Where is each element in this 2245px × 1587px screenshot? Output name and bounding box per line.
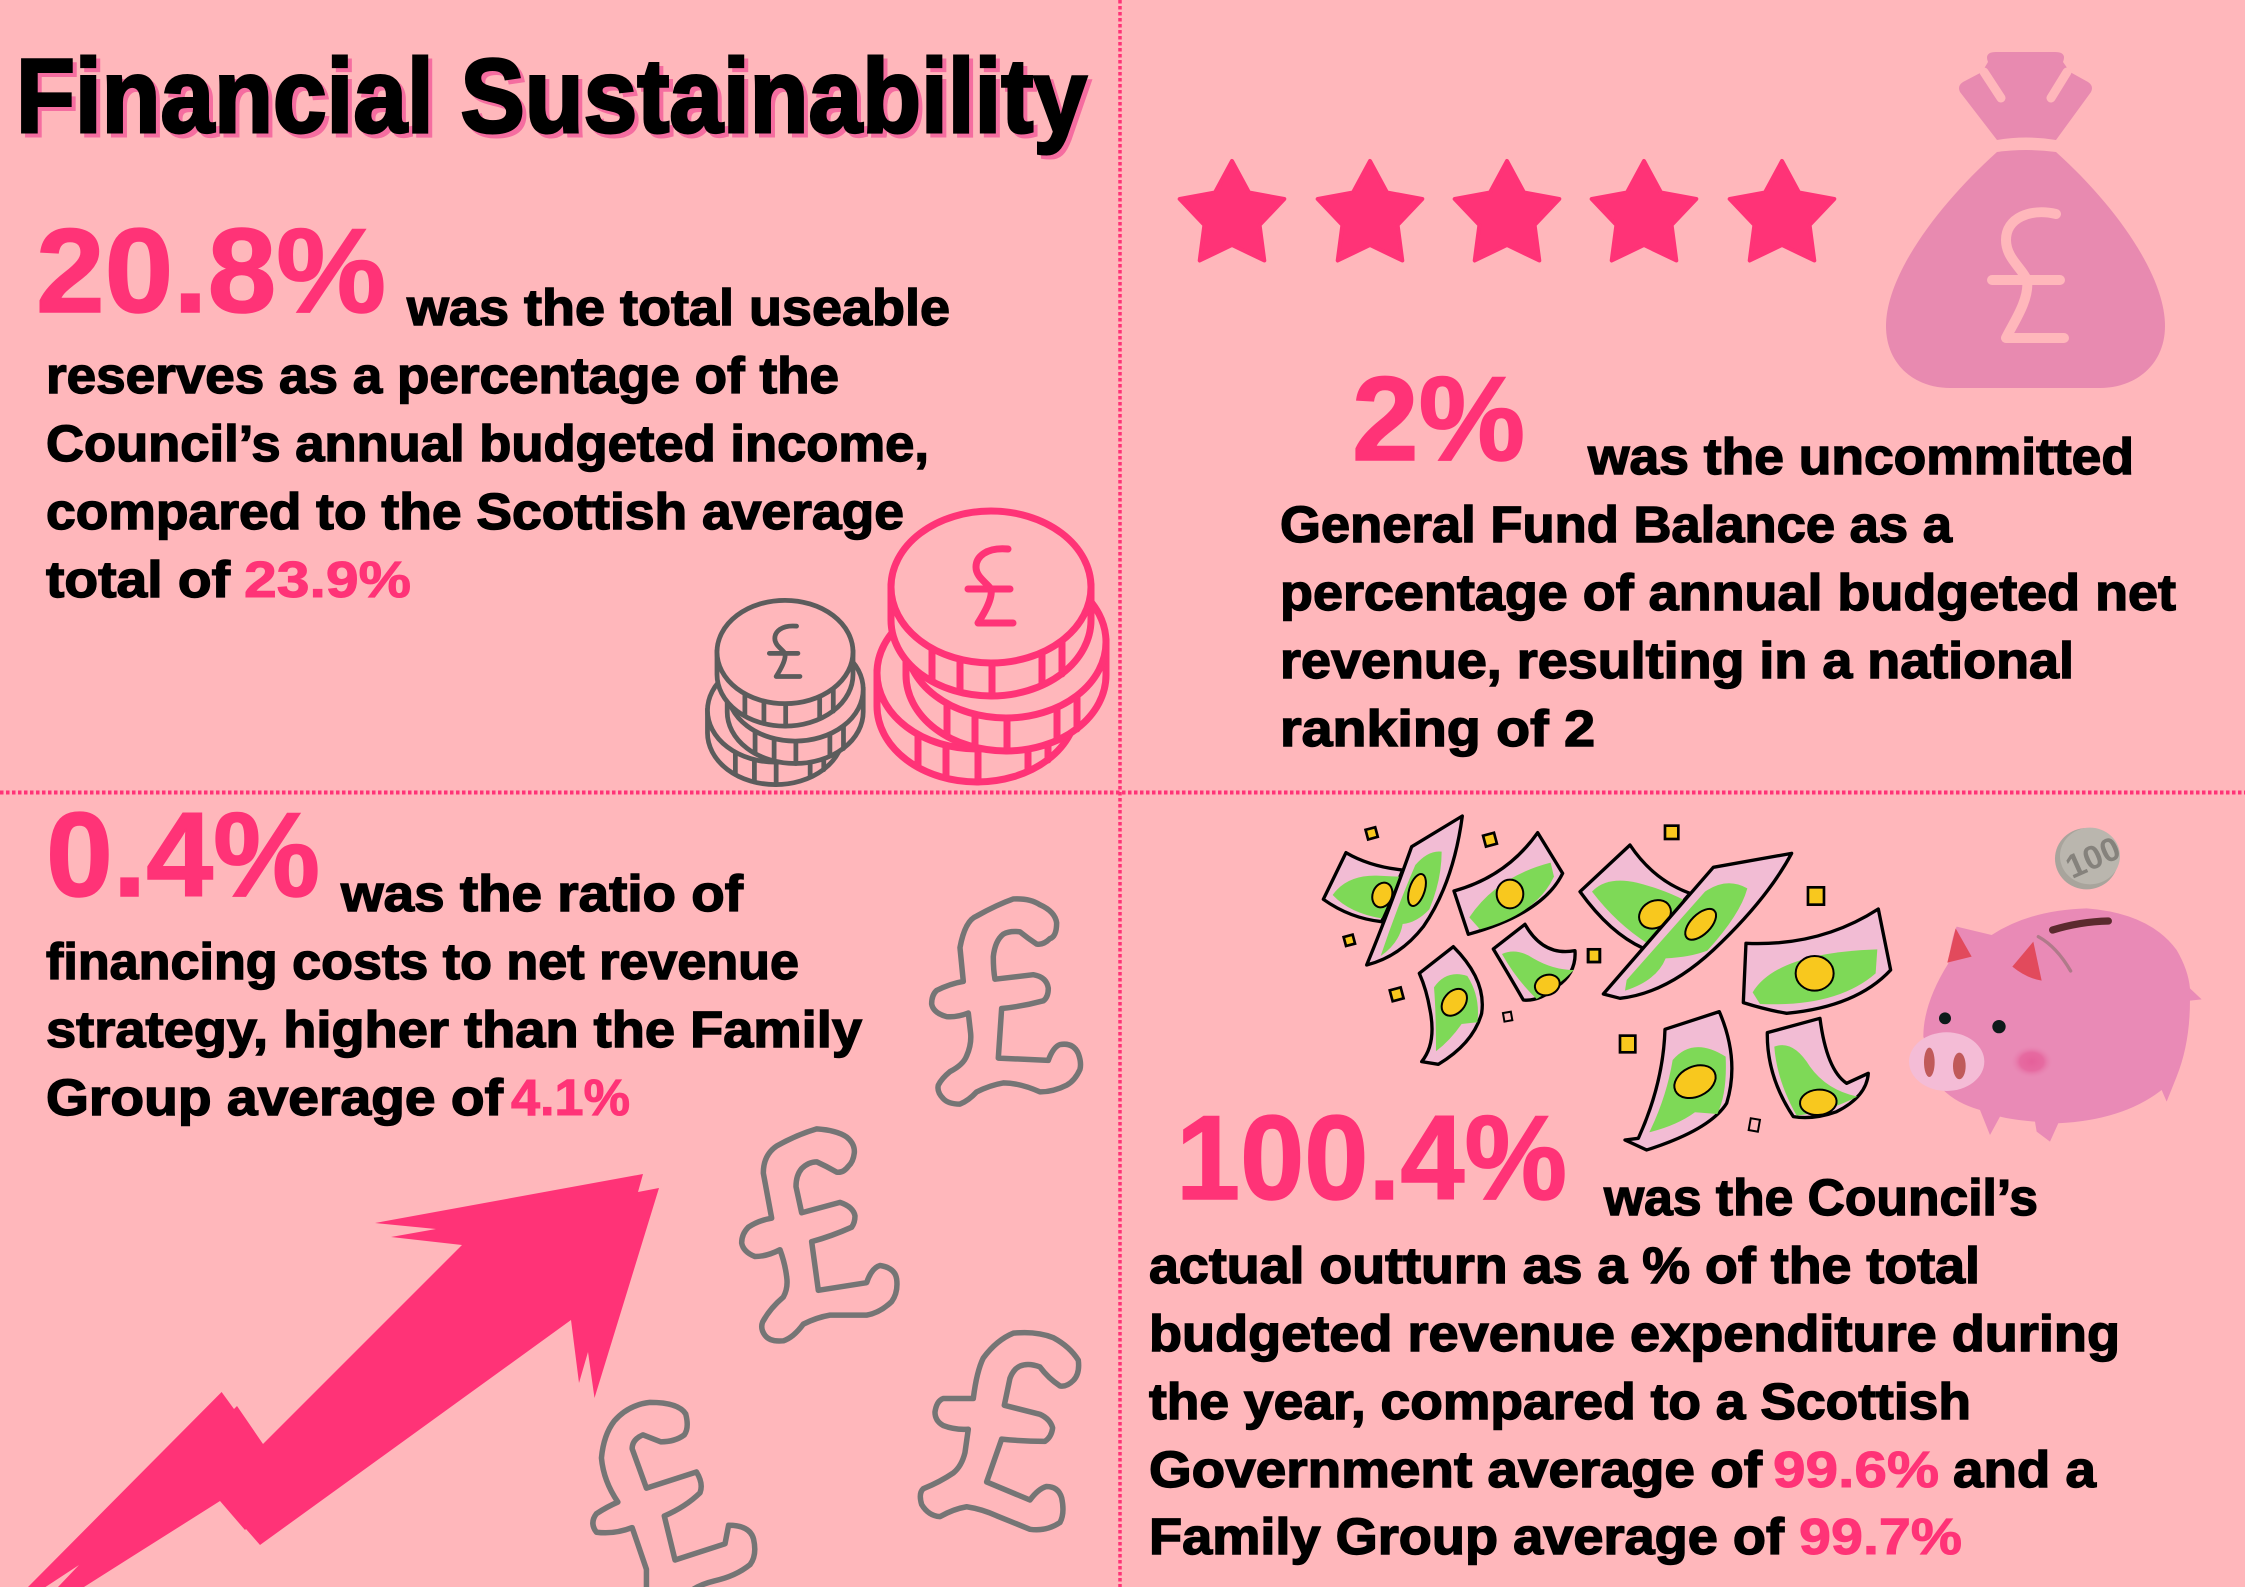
text block: reserves description: [46, 279, 950, 608]
text block: financing costs description: strategy, higher than the Family: [46, 1001, 863, 1058]
text block: reserves description: reserves as a percentage of the: [46, 347, 839, 404]
text block: outturn description: Family Group average of: [1149, 1508, 1785, 1565]
icon: money bag: [1886, 52, 2165, 388]
illustration: flying banknotes right: [1580, 826, 1891, 1150]
icon: banknote I: [1625, 1012, 1732, 1150]
text block: outturn description: Government average of: [1149, 1441, 1763, 1498]
icon: pink coin stack: [877, 511, 1106, 782]
icon: pound outline top right: [932, 899, 1081, 1104]
icon: sparkles: [1588, 826, 1824, 1132]
icon: sparkles: [1344, 827, 1600, 1022]
panel: total useable reserves: [16, 38, 1106, 785]
icon: falling 100 coin: 100: [2060, 830, 2126, 886]
text block: reserves description: total of: [46, 551, 231, 608]
text block: general fund description: General Fund Balance as a: [1280, 496, 1953, 553]
icon: pig eyes: [1939, 1012, 2006, 1033]
text block: outturn description: 99.7%: [1799, 1508, 1962, 1565]
text block: outturn description: budgeted revenue expenditure during: [1149, 1305, 2120, 1362]
text block: general fund description: percentage of annual budgeted net: [1280, 564, 2176, 621]
panel: uncommitted general fund balance: [1180, 52, 2176, 757]
text block: reserves description: 23.9%: [244, 551, 411, 608]
statistic: 100.4%: 100.4%: [1176, 1091, 1567, 1225]
icon: pound outline bottom centre: [593, 1402, 755, 1587]
icon: banknote E: [1419, 947, 1482, 1064]
icon: five stars: [1180, 161, 1834, 260]
text block: general fund description: ranking of 2: [1280, 700, 1595, 757]
icon: pig cheek: [2010, 1045, 2053, 1078]
text block: outturn description: was the Council’s: [1603, 1169, 2038, 1226]
text block: financing costs description: financing costs to net revenue: [46, 933, 799, 990]
icon: banknote B: [1367, 816, 1462, 965]
icon: banknote F: [1580, 845, 1690, 948]
text block: general fund description: [1280, 428, 2176, 757]
icon: pig ears: [1947, 928, 2042, 981]
text block: reserves description: Council’s annual budgeted income,: [46, 415, 929, 472]
text block: financing costs description: 4.1%: [511, 1069, 630, 1126]
icon: banknote A: [1323, 853, 1403, 922]
text block: financing costs description: was the ratio of: [340, 865, 744, 922]
statistic: 20.8%: 20.8%: [36, 204, 386, 338]
text block: reserves description: compared to the Scottish average: [46, 483, 904, 540]
icon: pig snout: [1909, 1032, 1984, 1091]
text block: outturn description: actual outturn as a % of the total: [1149, 1237, 1980, 1294]
text block: outturn description: and a: [1953, 1441, 2097, 1498]
statistic: 0.4%: 0.4%: [46, 788, 320, 922]
icon: pound outline middle: [742, 1129, 897, 1341]
icon: coin slot: [2038, 921, 2108, 971]
icon: banknote G: [1603, 853, 1792, 998]
text block: reserves description: was the total useable: [406, 279, 950, 336]
text block: general fund description: revenue, resulting in a national: [1280, 632, 2074, 689]
illustration: flying banknotes left: [1323, 816, 1600, 1064]
panel: financing costs ratio: [28, 788, 1081, 1587]
icon: banknote D: [1493, 924, 1575, 1000]
title: Financial Sustainability: [20, 42, 1091, 159]
icon: banknote J: [1767, 1018, 1868, 1118]
icon: banknote C: [1454, 833, 1563, 934]
icon: banknote H: [1743, 909, 1891, 1013]
icon: pound outline bottom right: [920, 1333, 1079, 1530]
text block: outturn description: 99.6%: [1773, 1441, 1939, 1498]
illustration: piggy bank with coin: [1909, 828, 2202, 1142]
icon: grey coin stack: [707, 600, 863, 785]
icon: pig body: [1923, 908, 2202, 1142]
statistic: 2%: 2%: [1352, 352, 1525, 486]
text block: financing costs description: Group average of: [46, 1069, 504, 1126]
text block: outturn description: [1149, 1169, 2120, 1565]
text block: general fund description: was the uncommitted: [1587, 428, 2134, 485]
text block: financing costs description: [46, 865, 863, 1126]
title: Financial Sustainability: [16, 38, 1087, 155]
icon: rising arrow: [28, 1174, 659, 1587]
text block: outturn description: the year, compared to a Scottish: [1149, 1373, 1971, 1430]
panel: actual outturn: [1149, 816, 2202, 1565]
